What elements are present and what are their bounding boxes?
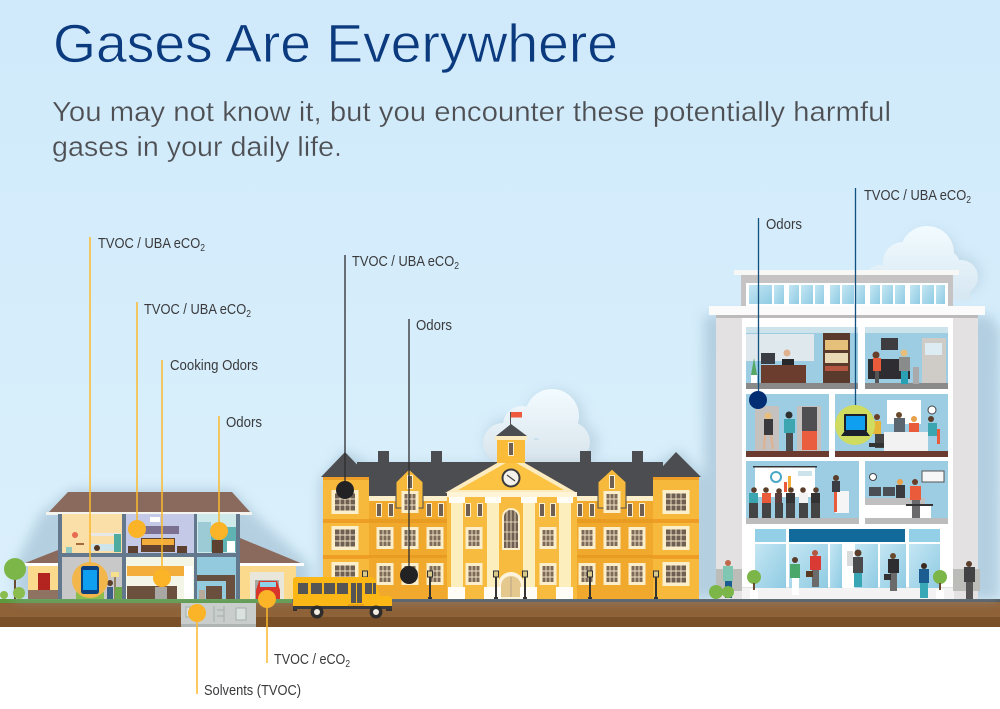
room: executive office bbox=[746, 327, 858, 389]
callout lines: school bbox=[345, 255, 409, 575]
room: presentation bbox=[746, 461, 859, 524]
labels: office: 2 bbox=[966, 195, 971, 206]
house: basement bbox=[181, 603, 256, 627]
marker dot: office bbox=[749, 391, 767, 409]
room: meeting room bbox=[835, 394, 948, 457]
subtitle: You may not know it, but you encounter these potentially harmful bbox=[52, 96, 891, 127]
house bbox=[0, 492, 304, 627]
labels: school: 2 bbox=[454, 261, 459, 272]
school: left wing bbox=[321, 452, 369, 599]
school bbox=[321, 412, 701, 599]
school: pediment bbox=[445, 455, 577, 497]
school: cupola bbox=[495, 412, 527, 463]
labels: office: Odors bbox=[766, 216, 802, 233]
marker dots: home bbox=[128, 520, 276, 622]
labels: school: Odors bbox=[416, 317, 452, 334]
office: penthouse bbox=[734, 270, 959, 306]
lobby bbox=[716, 529, 980, 599]
room: elevator lobby bbox=[746, 394, 829, 457]
labels: home: TVOC / eCO bbox=[274, 651, 359, 668]
callout lines: office bbox=[758, 188, 856, 410]
labels: home: 2 bbox=[246, 309, 251, 320]
callout lines: home bbox=[90, 237, 267, 694]
house: walls bbox=[58, 514, 240, 599]
plants bbox=[709, 570, 947, 599]
tree bbox=[0, 558, 26, 599]
cloud behind office bbox=[865, 226, 982, 300]
labels: home: TVOC / UBA eCO bbox=[98, 235, 217, 252]
labels: office: TVOC / UBA eCO bbox=[864, 187, 983, 204]
ground bbox=[0, 599, 1000, 627]
office: body bbox=[716, 315, 978, 599]
school: gables bbox=[396, 469, 626, 508]
school: main roof bbox=[357, 451, 663, 496]
house: master bedroom bbox=[126, 514, 194, 553]
house: laundry room bbox=[197, 557, 236, 599]
icon: laptop in office bbox=[835, 405, 875, 445]
house: kitchen bbox=[126, 557, 194, 599]
icon: clock bbox=[502, 468, 520, 488]
subtitle: gases in your daily life. bbox=[52, 131, 342, 162]
icon: tablet in home bbox=[72, 562, 108, 598]
subtitle bbox=[52, 96, 891, 162]
house: bedroom 1 bbox=[62, 514, 122, 553]
house: bathroom bbox=[197, 514, 236, 553]
school: right wing bbox=[653, 452, 701, 599]
house: right wing with garage bbox=[240, 538, 303, 564]
room: lounge bbox=[865, 327, 948, 389]
school: windows bbox=[332, 442, 690, 586]
house: main roof bbox=[49, 492, 250, 512]
labels: home: TVOC / UBA eCO bbox=[144, 301, 263, 318]
room: reception bbox=[865, 461, 948, 524]
school: centre block bbox=[447, 493, 577, 599]
school bus bbox=[293, 577, 392, 618]
labels: school bbox=[352, 253, 459, 334]
labels: home: Cooking Odors bbox=[170, 357, 258, 374]
office: roof slab bbox=[709, 306, 985, 318]
labels: school: TVOC / UBA eCO bbox=[352, 253, 471, 270]
building shadows bbox=[15, 315, 1000, 600]
labels: home: Solvents (TVOC) bbox=[204, 682, 301, 699]
marker dots: school bbox=[336, 481, 418, 584]
people outside bbox=[723, 550, 975, 599]
school: door bbox=[498, 572, 524, 599]
labels: home bbox=[98, 235, 350, 699]
street lamps bbox=[362, 571, 658, 599]
title: Gases Are Everywhere bbox=[53, 14, 618, 74]
labels: home: 2 bbox=[200, 243, 205, 254]
office building bbox=[709, 270, 985, 599]
cloud behind school bbox=[483, 389, 599, 469]
labels: office bbox=[766, 187, 971, 233]
school: arched window bbox=[503, 509, 519, 549]
labels: home: 2 bbox=[345, 659, 350, 670]
school: columns bbox=[448, 497, 573, 599]
school: body bbox=[369, 496, 653, 599]
labels: home: Odors bbox=[226, 414, 262, 431]
house: living room bbox=[62, 557, 122, 599]
house: left wing bbox=[20, 550, 58, 565]
